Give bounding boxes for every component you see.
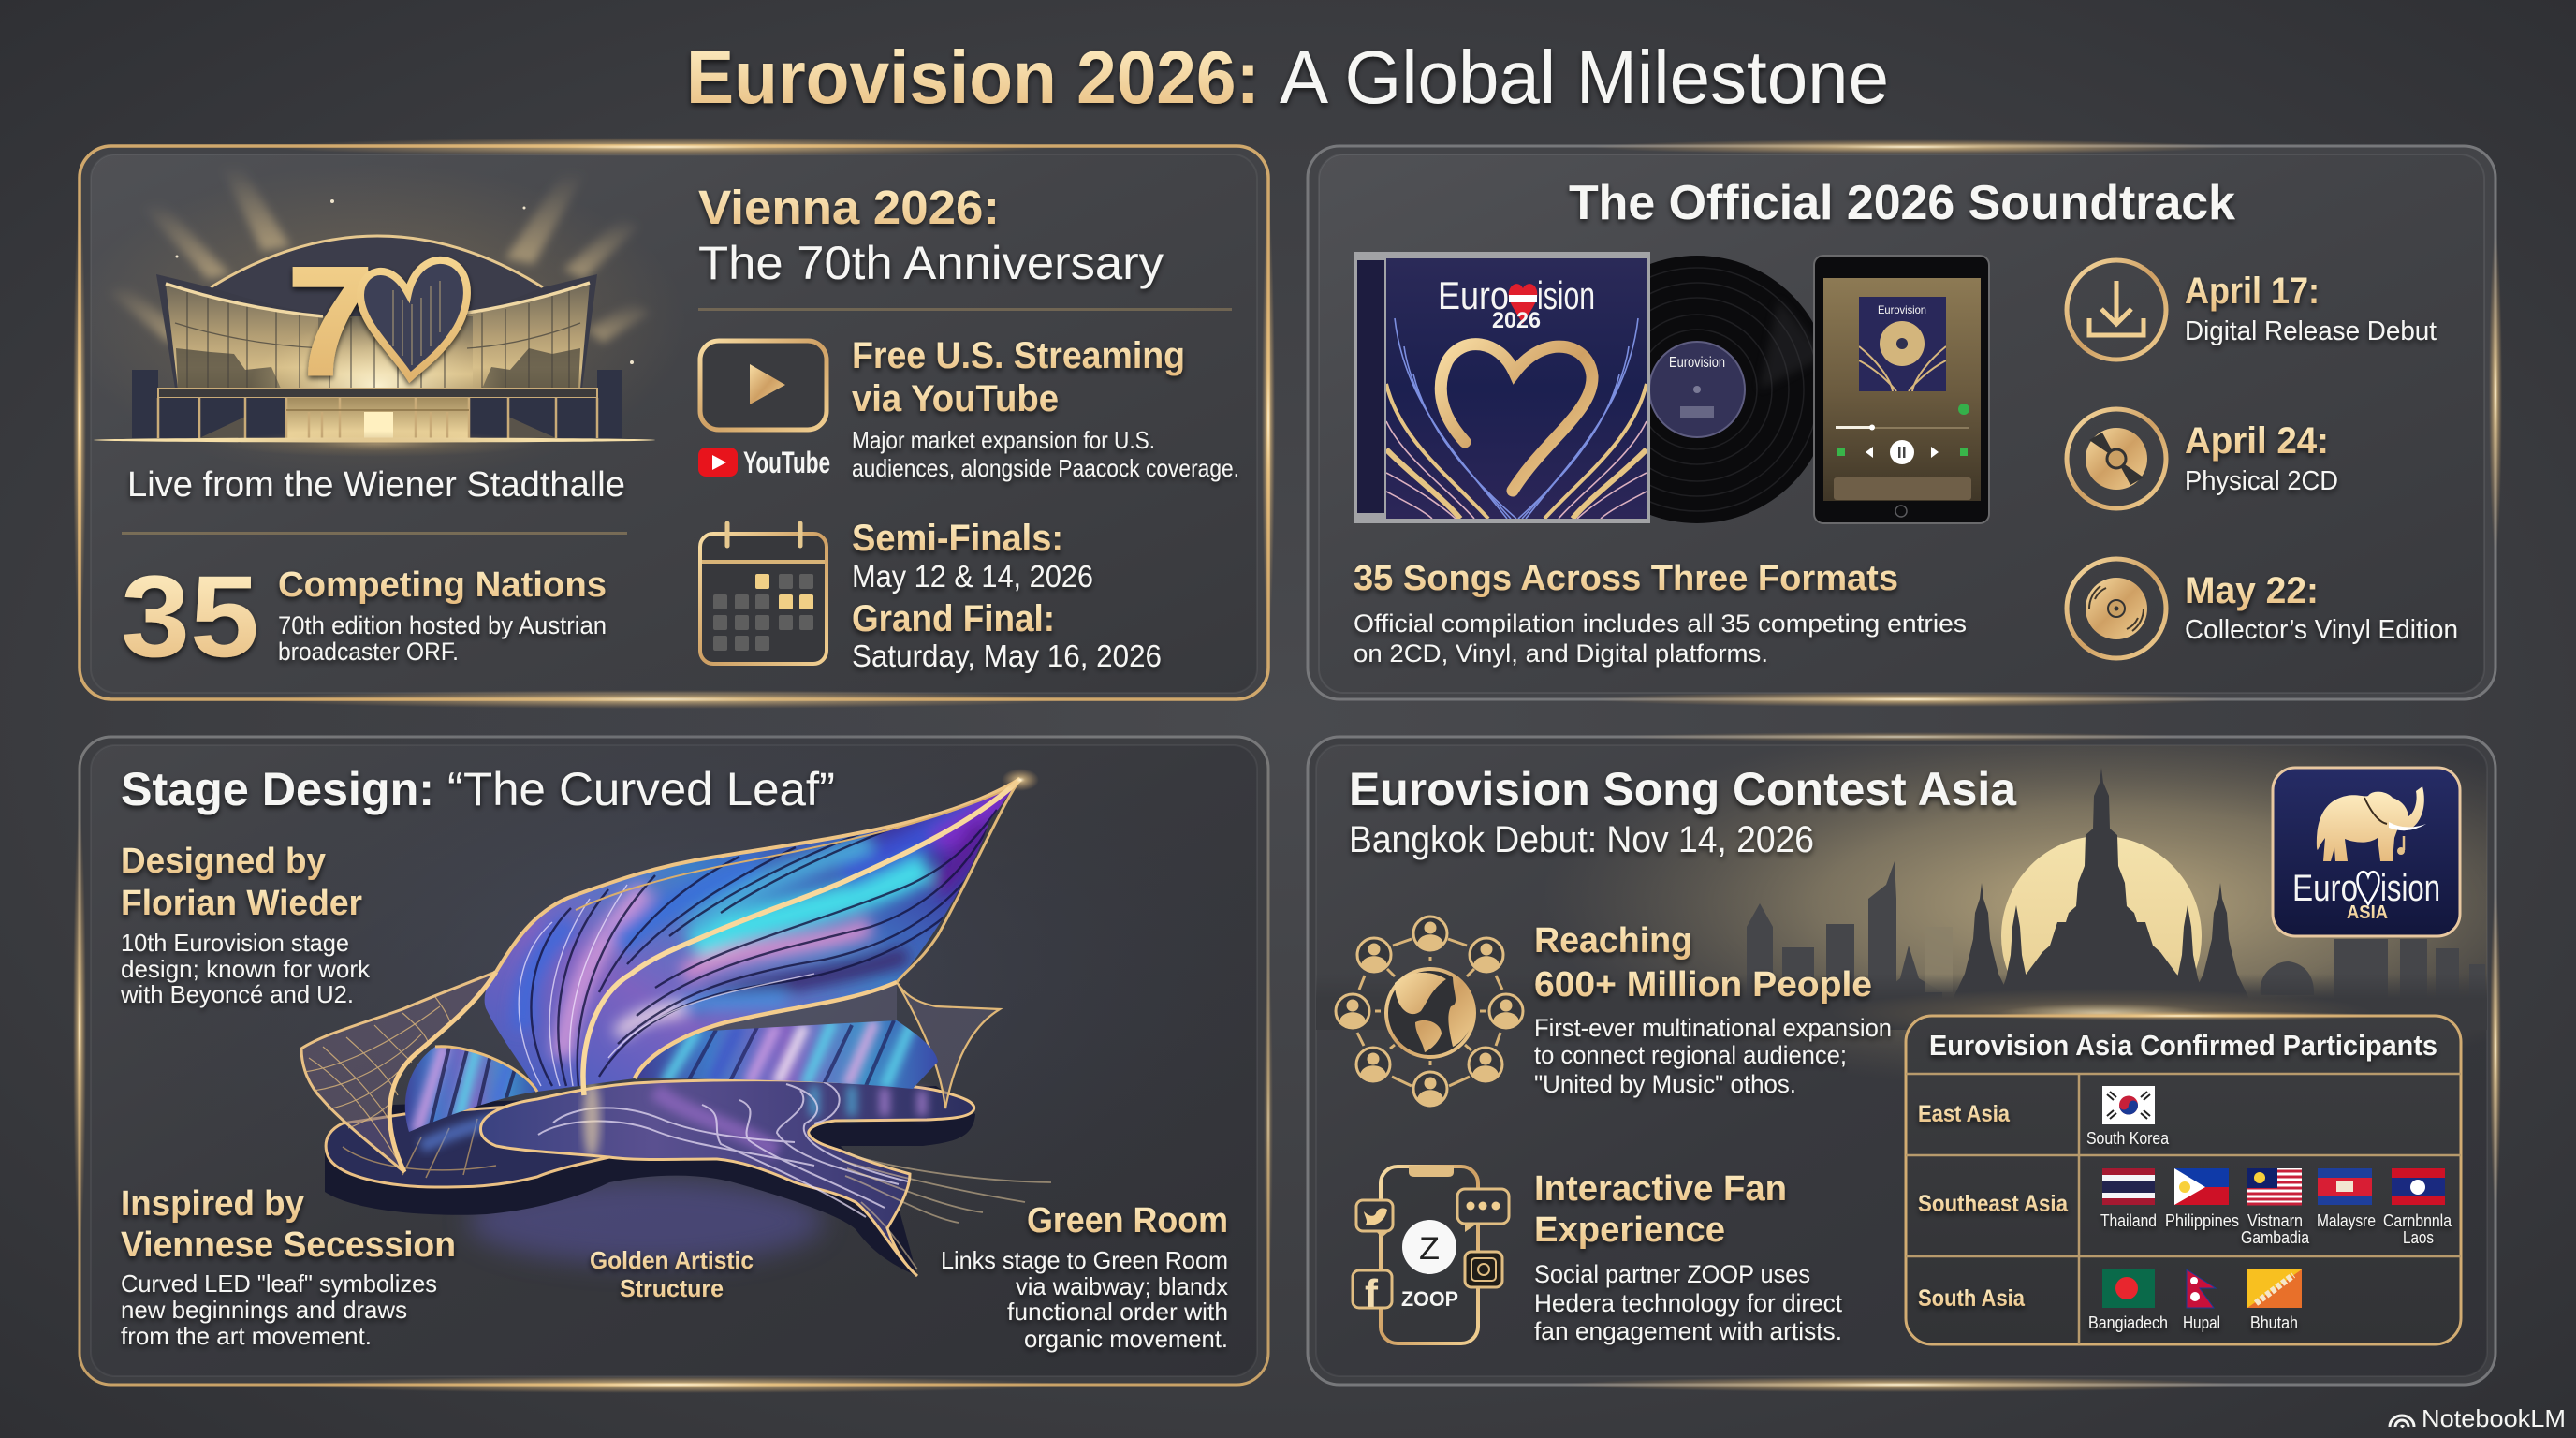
stage base: [325, 1079, 1051, 1276]
icon: vinyl: [2067, 559, 2166, 658]
illustration: vinyl record: Eurovision: [1669, 355, 1725, 371]
country labels: Philippines: [2165, 1211, 2239, 1230]
country labels: [2086, 1129, 2452, 1332]
heading: Vienna 2026: The 70th Anniversary: [698, 237, 1164, 289]
text: free U.S. streaming: Major market expansion for U.S.: [852, 426, 1155, 454]
icon: ZOOP phone with social bubbles: Z: [1419, 1231, 1440, 1267]
stat: 35 competing nations: broadcaster ORF.: [278, 638, 459, 666]
country labels: Hupal: [2183, 1313, 2220, 1332]
text: contest dates: Saturday, May 16, 2026: [852, 638, 1162, 673]
illustration: Bangkok skyline: [1316, 745, 2487, 1064]
footer: NotebookLM mark: NotebookLM: [2422, 1404, 2566, 1432]
panel: soundtrack: [1308, 139, 2502, 707]
flag: Bhutan: [2247, 1269, 2302, 1308]
title: Eurovision 2026:: [686, 36, 1260, 119]
text: April 24: April 24:: [2185, 420, 2329, 462]
text: green room: functional order with: [1007, 1298, 1228, 1326]
table: confirmed participants: [1906, 1011, 2461, 1344]
text: designed by: with Beyoncé and U2.: [120, 980, 354, 1008]
main leaf: [389, 769, 1039, 1172]
title: A Global Milestone: [1280, 36, 1889, 119]
illustration: tablet player: Eurovision: [1878, 303, 1926, 316]
text: green room: Green Room: [1027, 1201, 1228, 1240]
text: designed by: Florian Wieder: [121, 884, 362, 923]
text: contest dates: Semi-Finals:: [852, 518, 1063, 559]
icon: download: [2067, 260, 2166, 360]
text: inspired by: Curved LED "leaf" symbolizes: [121, 1269, 437, 1298]
country labels: Vistnarn: [2247, 1211, 2303, 1230]
illustration: CD case: 2026: [1492, 308, 1541, 333]
text: reaching 600+ million: First-ever multinational expansion: [1534, 1014, 1892, 1042]
stat: 35 competing nations: 70th edition hosted by Austrian: [278, 611, 607, 639]
text: May 22: May 22:: [2185, 570, 2319, 611]
icon: play button and YouTube logo: YouTube: [743, 446, 830, 479]
text: interactive fan experience: Interactive Fan: [1534, 1169, 1787, 1209]
text: designed by: Designed by: [121, 842, 326, 881]
country labels: Carnbnnla: [2383, 1211, 2452, 1230]
text: green room: Links stage to Green Room: [941, 1246, 1228, 1274]
region labels: Southeast Asia: [1918, 1191, 2069, 1217]
icon: globe network: [1336, 917, 1523, 1106]
label: golden artistic structure: Golden Artistic: [590, 1246, 754, 1274]
country labels: Malaysre: [2317, 1211, 2376, 1230]
text: May 22: [2185, 570, 2458, 645]
text: inspired by: Inspired by: [121, 1184, 304, 1224]
stat: 35 competing nations: [121, 552, 607, 682]
flag: South Korea: [2102, 1086, 2155, 1124]
illustration: tablet player: [1814, 256, 1989, 523]
flag: Nepal: [2187, 1269, 2216, 1308]
heading: stage design: [121, 763, 835, 815]
text: interactive fan experience: Social partner ZOOP uses: [1534, 1260, 1810, 1288]
right LED arch: [637, 1020, 938, 1089]
text: designed by: design; known for work: [121, 955, 371, 983]
heading: stage design: “The Curved Leaf”: [447, 763, 835, 815]
stat: 35 competing nations: 35: [121, 552, 259, 682]
badge: Eurovision Asia: Euro: [2292, 868, 2358, 909]
text: inspired by: Viennese Secession: [121, 1225, 456, 1265]
region labels: [1918, 1101, 2069, 1312]
flag: Laos: [2392, 1168, 2445, 1205]
country labels: South Korea: [2086, 1129, 2170, 1148]
label: golden artistic structure: [590, 1246, 754, 1302]
text: inspired by: from the art movement.: [121, 1322, 372, 1350]
flag: Cambodia: [2318, 1168, 2372, 1205]
badge: Eurovision Asia: ASIA: [2347, 902, 2388, 923]
icon: ZOOP phone with social bubbles: ZOOP: [1401, 1287, 1458, 1311]
text: interactive fan experience: fan engagement with artists.: [1534, 1317, 1842, 1345]
badge: Eurovision Asia: [2273, 768, 2460, 936]
text: April 17: Digital Release Debut: [2185, 316, 2437, 346]
badge: Eurovision Asia: ision: [2380, 868, 2440, 909]
caption: live from: Live from the Wiener Stadthalle: [127, 465, 625, 505]
illustration: Wiener Stadthalle with 70 heart: [68, 164, 686, 482]
region labels: South Asia: [1918, 1285, 2026, 1312]
left wire wing: [301, 972, 496, 1172]
left LED arch: [404, 1047, 535, 1132]
flag: Philippines: [2174, 1168, 2229, 1205]
heading: Eurovision Song Contest Asia: Eurovision Song Contest Asia: [1349, 763, 2017, 815]
icon: ZOOP phone with social bubbles: [1353, 1166, 1509, 1343]
text: May 22: Collector’s Vinyl Edition: [2185, 615, 2458, 645]
flag: Bangladesh: [2102, 1269, 2155, 1308]
country labels: Bhutah: [2250, 1313, 2298, 1332]
country labels: Gambadia: [2241, 1228, 2310, 1247]
panel: stage design: [73, 655, 1273, 1393]
text: reaching 600+ million: "United by Music" othos.: [1534, 1070, 1796, 1098]
text: contest dates: May 12 & 14, 2026: [852, 559, 1093, 594]
text: 35 songs: Official compilation includes all 35 competing entries: [1354, 609, 1967, 638]
icon: ZOOP phone with social bubbles: f: [1365, 1271, 1379, 1315]
text: contest dates: [852, 518, 1162, 673]
text: April 24: Physical 2CD: [2185, 466, 2338, 496]
illustration: vinyl record: [1563, 256, 1831, 523]
heading: stage design: Stage Design:: [121, 763, 434, 815]
illustration: CD case: Euro: [1438, 273, 1509, 317]
country labels: Thailand: [2100, 1211, 2157, 1230]
text: designed by: 10th Eurovision stage: [121, 929, 349, 957]
text: reaching 600+ million: Reaching: [1534, 921, 1692, 961]
panel: Vienna 2026: [68, 138, 1275, 709]
panel: Eurovision Asia: [1308, 712, 2576, 1392]
text: interactive fan experience: Experience: [1534, 1211, 1725, 1250]
text: free U.S. streaming: [852, 335, 1239, 482]
label: golden artistic structure: Structure: [620, 1274, 724, 1302]
text: inspired by: new beginnings and draws: [121, 1296, 407, 1324]
illustration: CD case: [1354, 252, 1650, 523]
text: April 17: [2185, 271, 2437, 346]
heading: Vienna 2026: Vienna 2026:: [698, 181, 1000, 234]
wire band above right arch: [692, 982, 897, 1032]
text: reaching 600+ million: [1534, 921, 1892, 1098]
heading: Vienna 2026: [698, 181, 1164, 289]
icon: CD disc: [2067, 409, 2166, 508]
icon: calendar: [700, 523, 827, 664]
heading: Eurovision Song Contest Asia: [1349, 763, 2017, 860]
text: green room: organic movement.: [1024, 1325, 1228, 1353]
text: free U.S. streaming: Free U.S. Streaming: [852, 335, 1185, 376]
text: 35 songs: 35 Songs Across Three Formats: [1354, 559, 1898, 598]
text: 35 songs: on 2CD, Vinyl, and Digital platforms.: [1354, 639, 1768, 668]
text: green room: [941, 1201, 1228, 1353]
illustration: CD case: ision: [1537, 273, 1595, 317]
text: 35 songs: [1354, 559, 1967, 668]
text: April 17: April 17:: [2185, 271, 2320, 312]
text: inspired by: [121, 1184, 456, 1350]
text: contest dates: Grand Final:: [852, 598, 1055, 639]
text: free U.S. streaming: via YouTube: [852, 378, 1059, 419]
text: reaching 600+ million: 600+ Million People: [1534, 965, 1872, 1005]
text: interactive fan experience: [1534, 1169, 1842, 1345]
heading: soundtrack: The Official 2026 Soundtrack: [1569, 176, 2235, 230]
region labels: East Asia: [1918, 1101, 2011, 1127]
text: interactive fan experience: Hedera technology for direct: [1534, 1289, 1842, 1317]
flag: Malaysia: [2247, 1168, 2302, 1205]
title: [686, 36, 1889, 119]
text: designed by: [120, 842, 371, 1008]
table title: Eurovision Asia Confirmed Participants: [1929, 1029, 2437, 1062]
illustration: Wiener Stadthalle with 70 heart: 7: [287, 235, 373, 407]
country labels: Laos: [2403, 1228, 2434, 1247]
text: April 24: [2185, 420, 2338, 496]
right wire wing: [897, 982, 1000, 1108]
text: green room: via waibway; blandx: [1016, 1272, 1228, 1300]
stat: 35 competing nations: Competing Nations: [278, 565, 607, 605]
text: reaching 600+ million: to connect regional audience;: [1534, 1041, 1847, 1069]
flag: Thailand: [2102, 1168, 2155, 1205]
illustration: curved leaf stage: [300, 697, 1051, 1277]
text: free U.S. streaming: audiences, alongside Paacock coverage.: [852, 454, 1239, 482]
country labels: Bangiadech: [2088, 1313, 2168, 1332]
icon: play button and YouTube logo: [698, 341, 830, 479]
heading: Eurovision Song Contest Asia: Bangkok Debut: Nov 14, 2026: [1349, 819, 1814, 860]
